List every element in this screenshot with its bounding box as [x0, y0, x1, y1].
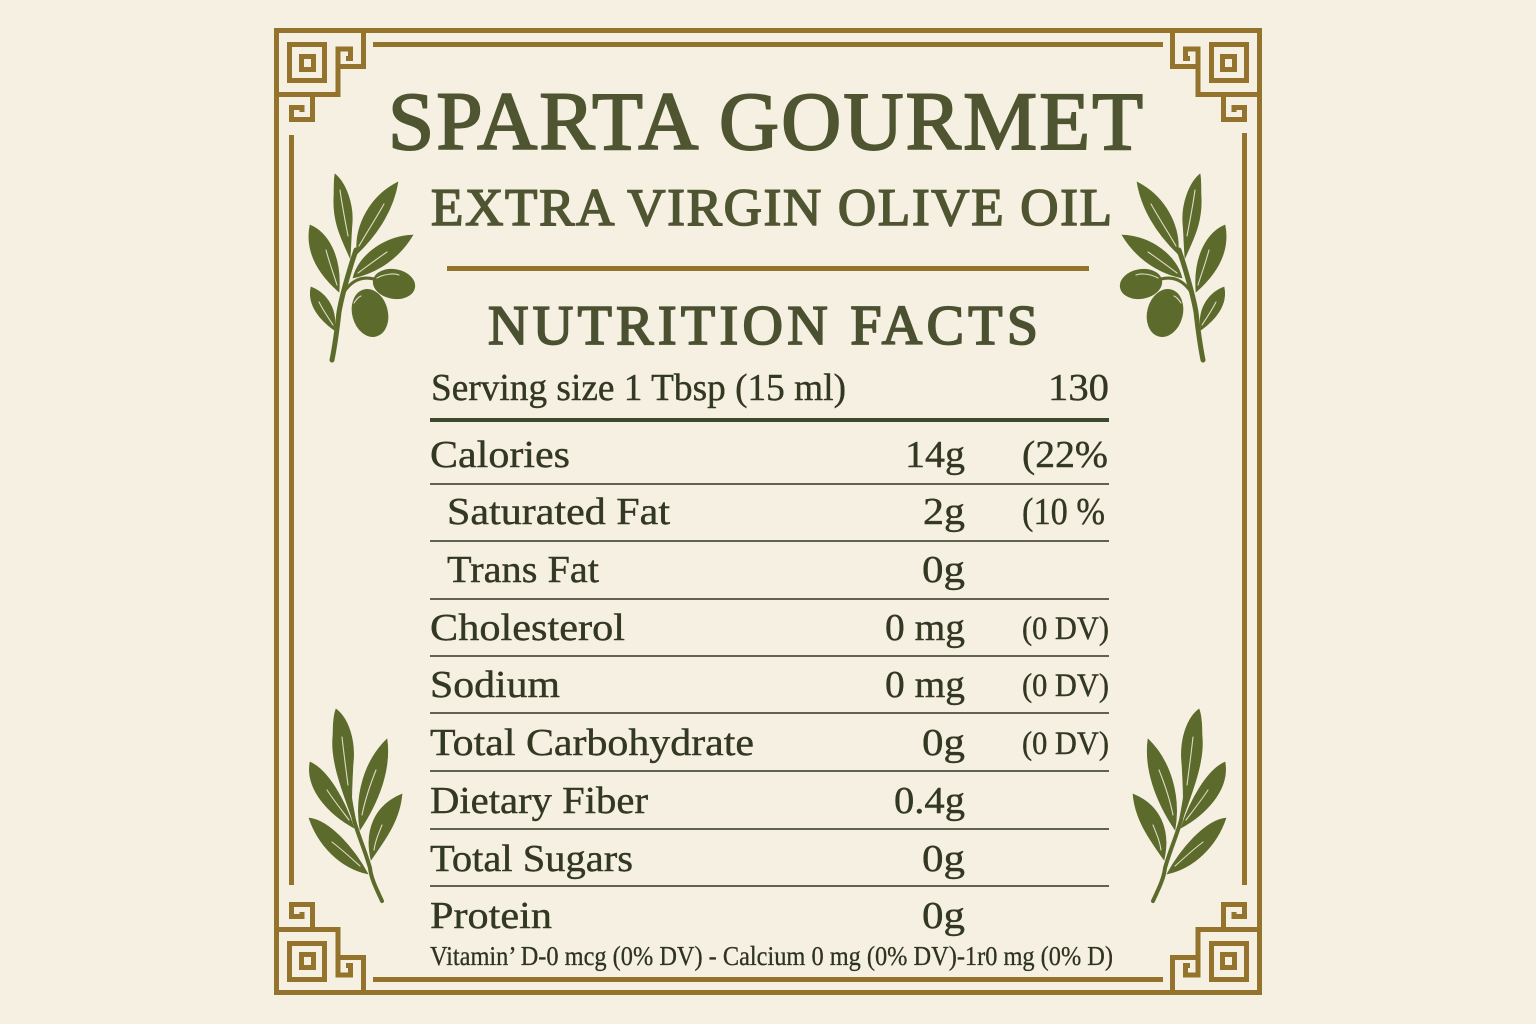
row: calories: (22%	[1022, 434, 1108, 476]
row: saturated fat: (10 %	[1022, 491, 1105, 533]
nutrition table	[430, 367, 1109, 937]
corner: bottom left	[276, 904, 364, 994]
icon: olive sprig bottom left	[309, 709, 402, 901]
row: total carbohydrate: Total Carbohydrate	[430, 722, 754, 764]
title: SPARTA GOURMET	[388, 75, 1143, 167]
corner: bottom right	[1172, 904, 1260, 994]
row: cholesterol	[430, 607, 1109, 649]
inner border lines	[292, 44, 1244, 980]
row: saturated fat: 2g	[923, 491, 965, 533]
subtitle: EXTRA VIRGIN OLIVE OIL	[431, 179, 1112, 237]
ornate border frame	[276, 30, 1260, 994]
row: total carbohydrate	[430, 722, 1109, 764]
row: cholesterol: 0 mg	[885, 607, 965, 649]
row: sodium: (0 DV)	[1022, 668, 1109, 704]
serving size row: Serving size 1 Tbsp (15 ml)	[431, 367, 846, 409]
icon: olive branch top right	[1118, 174, 1226, 360]
row: total sugars	[430, 838, 965, 880]
row: saturated fat: Saturated Fat	[447, 491, 670, 533]
row: calories	[430, 434, 1108, 476]
row: total carbohydrate: 0g	[922, 722, 965, 764]
row: dietary fiber: 0.4g	[894, 780, 965, 822]
serving size row	[431, 367, 1109, 409]
corner: top left	[276, 30, 364, 120]
corner: top right	[1172, 30, 1260, 120]
row: trans fat	[447, 549, 965, 591]
row: protein: Protein	[430, 895, 552, 937]
row: saturated fat	[447, 491, 1105, 533]
divider rule	[447, 266, 1089, 271]
outer border	[276, 30, 1260, 992]
row: trans fat: 0g	[922, 549, 965, 591]
row: total sugars: Total Sugars	[430, 838, 633, 880]
row: sodium: 0 mg	[885, 664, 965, 706]
row: protein: 0g	[922, 895, 965, 937]
row: cholesterol: (0 DV)	[1022, 611, 1109, 647]
vitamin footnote: Vitamin’ D-0 mcg (0% DV) - Calcium 0 mg (0% DV)-1r0 mg (0% D)	[430, 941, 1113, 971]
icon: olive sprig bottom right	[1133, 709, 1226, 901]
row: sodium: Sodium	[430, 664, 560, 706]
row: sodium	[430, 664, 1109, 706]
heading: nutrition facts: NUTRITION FACTS	[488, 295, 1038, 357]
row: trans fat: Trans Fat	[447, 549, 599, 591]
row: calories: Calories	[430, 434, 570, 476]
serving size row: 130	[1048, 367, 1109, 409]
icon: olive branch top left	[309, 174, 417, 360]
row: total sugars: 0g	[922, 838, 965, 880]
row: cholesterol: Cholesterol	[430, 607, 625, 649]
row: protein	[430, 895, 965, 937]
row: total carbohydrate: (0 DV)	[1022, 726, 1109, 762]
row: dietary fiber	[430, 780, 965, 822]
row: calories: 14g	[905, 434, 965, 476]
row: dietary fiber: Dietary Fiber	[430, 780, 648, 822]
